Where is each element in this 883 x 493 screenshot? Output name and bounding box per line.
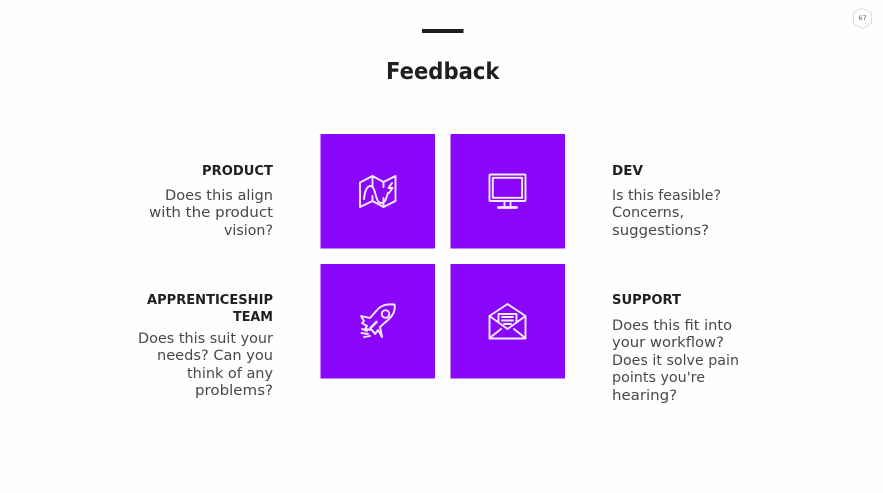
text block: product: with the product <box>149 205 273 221</box>
text block: support: Does it solve pain <box>612 353 739 369</box>
text block: support: hearing? <box>612 388 677 404</box>
text block: apprenticeship team: Does this suit your <box>138 331 273 347</box>
icon: rocket <box>361 304 395 337</box>
text block: support: Does this fit into <box>612 318 732 334</box>
text block: product <box>149 163 274 239</box>
text block: apprenticeship team: needs? Can you <box>157 348 273 364</box>
icon: open envelope <box>490 304 526 338</box>
page number badge <box>854 8 872 28</box>
text block: support: SUPPORT <box>612 292 682 308</box>
text block: apprenticeship team: APPRENTICESHIP <box>147 292 273 308</box>
text block: support: points you're <box>612 370 705 386</box>
page number badge: 67 <box>858 14 867 22</box>
text block: support: your workflow? <box>612 335 724 351</box>
panel: support tile <box>450 264 565 378</box>
text block: dev: suggestions? <box>612 223 709 239</box>
text block: support <box>612 292 739 404</box>
title accent bar <box>422 29 464 33</box>
icon: folded map <box>360 176 396 207</box>
icon: computer monitor <box>490 174 526 208</box>
text block: product: Does this align <box>165 188 273 204</box>
panel: product tile <box>320 134 435 248</box>
text block: dev: Concerns, <box>612 205 684 221</box>
text block: product: PRODUCT <box>202 163 274 179</box>
text block: dev: Is this feasible? <box>612 188 721 204</box>
panel: apprenticeship team tile <box>320 264 435 378</box>
text block: apprenticeship team: TEAM <box>233 309 273 325</box>
text block: apprenticeship team: think of any <box>187 366 273 382</box>
title: Feedback <box>386 59 500 85</box>
text block: dev <box>612 163 721 239</box>
text block: apprenticeship team: problems? <box>195 383 273 399</box>
text block: dev: DEV <box>612 163 644 179</box>
text block: apprenticeship team <box>138 292 273 399</box>
panel: dev tile <box>450 134 565 248</box>
text block: product: vision? <box>224 223 273 239</box>
